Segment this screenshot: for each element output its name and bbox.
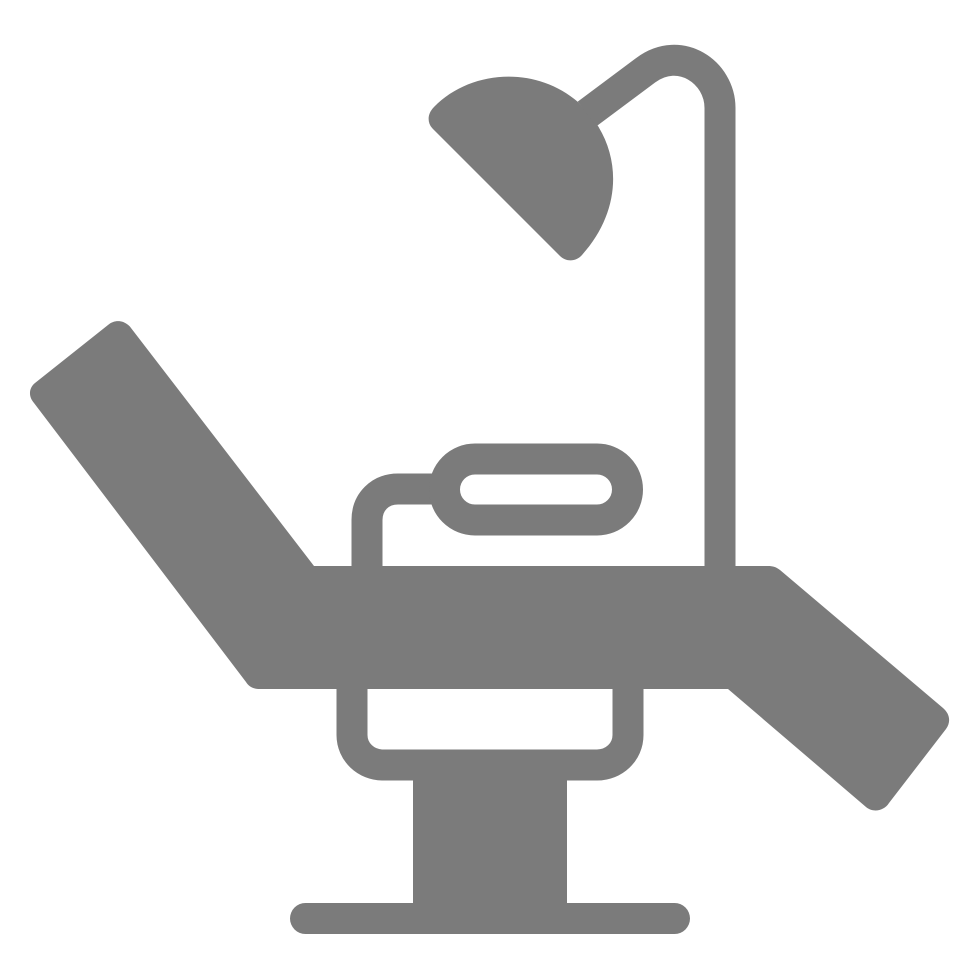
lamp head — [429, 77, 613, 260]
seat support bracket — [352, 680, 628, 765]
pedestal column — [413, 770, 567, 910]
instrument tray with hose — [367, 459, 628, 575]
chair backrest and seat with leg rest — [30, 321, 949, 810]
base plate — [290, 903, 690, 934]
lamp arm and pole — [587, 60, 720, 575]
